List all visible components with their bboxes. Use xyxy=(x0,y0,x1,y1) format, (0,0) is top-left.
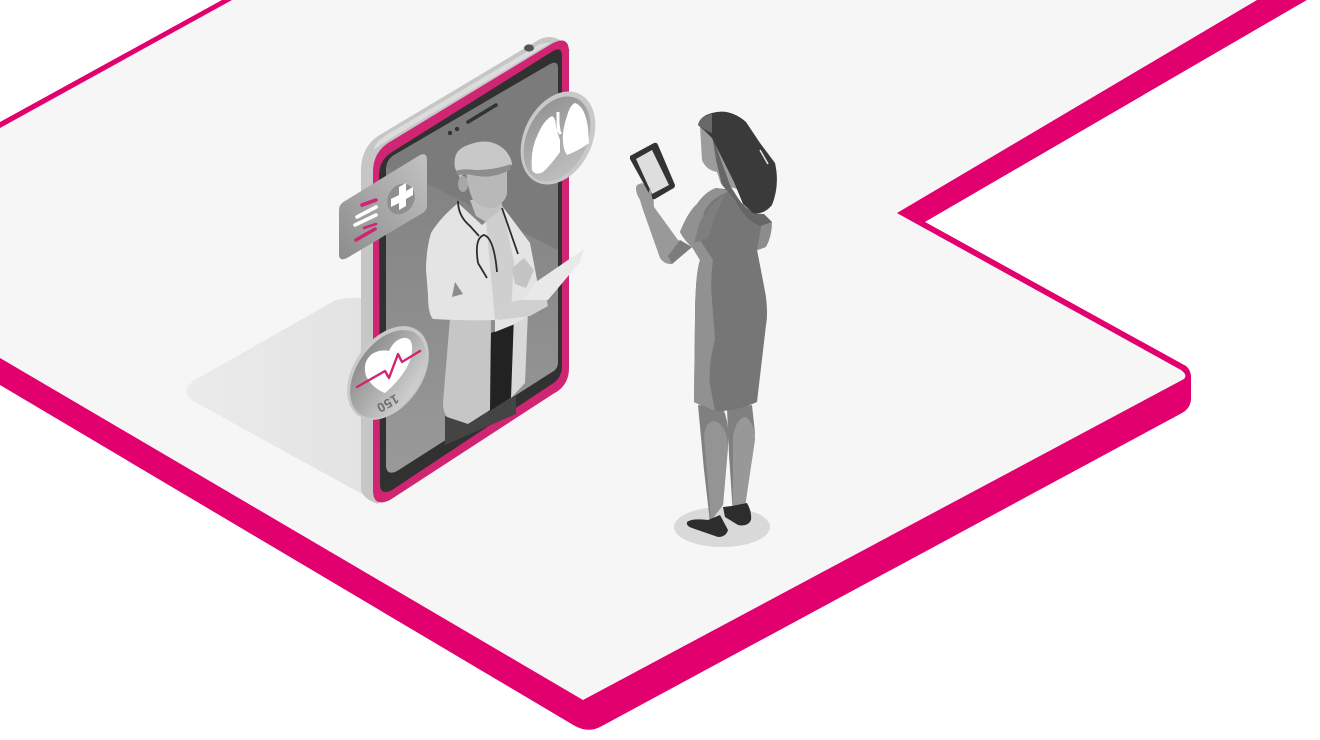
left leg xyxy=(698,405,728,522)
doctor xyxy=(426,141,584,445)
floor shadow xyxy=(674,507,770,547)
dress back xyxy=(680,188,767,411)
card: medical cross xyxy=(339,154,427,259)
card text lines xyxy=(355,200,376,240)
handheld phone body xyxy=(630,143,675,199)
doctor tablet xyxy=(523,249,584,300)
platform: notch pink edge xyxy=(897,213,1191,378)
reading value: 150 xyxy=(374,391,402,416)
speaker bar xyxy=(468,105,496,122)
screen xyxy=(386,62,558,473)
heart disc face xyxy=(335,316,441,432)
doctor coat upper xyxy=(426,203,545,332)
camera hole xyxy=(524,44,534,52)
far arm xyxy=(755,222,772,251)
handheld phone screen xyxy=(636,150,669,194)
trachea xyxy=(558,112,561,134)
lungs disc rim xyxy=(506,79,610,197)
doctor shirt and tie xyxy=(486,208,514,320)
doctor hands xyxy=(496,296,548,320)
phone side edge xyxy=(361,37,570,504)
dress light side xyxy=(680,188,730,411)
doctor coat lower right xyxy=(511,312,528,398)
phone top highlight xyxy=(373,42,552,150)
right calf highlight xyxy=(733,417,755,514)
near arm xyxy=(636,183,692,264)
doctor ear xyxy=(458,176,468,192)
stethoscope xyxy=(458,201,518,278)
disc: heart rate xyxy=(330,311,446,435)
right shoe xyxy=(723,503,751,525)
heart disc rim xyxy=(330,311,446,435)
cross disc xyxy=(382,179,420,219)
screen back wall xyxy=(386,62,558,473)
sleeve shade xyxy=(694,193,726,243)
white cross xyxy=(391,183,413,210)
doctor coat lower left xyxy=(443,318,491,424)
doctor trouser shadow xyxy=(445,395,516,445)
doctor glasses strap xyxy=(456,164,511,177)
front camera dots xyxy=(448,127,459,135)
left calf highlight xyxy=(704,421,728,520)
doctor trousers xyxy=(488,324,515,412)
pulse line xyxy=(357,351,420,387)
right lung xyxy=(563,103,589,155)
coat sleeve gap xyxy=(452,282,463,297)
doctor hair xyxy=(455,141,512,178)
lungs disc face xyxy=(510,85,604,193)
large phone with doctor xyxy=(361,37,584,504)
phone cast shadow xyxy=(186,298,362,494)
left lung xyxy=(532,116,560,174)
screen floor xyxy=(386,168,558,480)
thumb xyxy=(646,187,654,207)
hair xyxy=(698,112,777,213)
phone dark bezel xyxy=(379,49,562,492)
left shoe xyxy=(687,515,728,537)
arm shade xyxy=(668,240,692,264)
card body xyxy=(339,154,427,259)
disc: lungs xyxy=(506,79,610,197)
hair front xyxy=(698,114,712,133)
hair underside xyxy=(712,135,772,226)
neck and face xyxy=(700,125,740,190)
hair highlight xyxy=(760,150,768,164)
right leg xyxy=(727,405,755,514)
doctor neck xyxy=(470,198,503,222)
platform: notch cut-out xyxy=(925,0,1320,366)
doctor face xyxy=(466,166,507,208)
woman holding a phone xyxy=(630,112,777,547)
phone pink frame xyxy=(373,40,569,502)
heart icon xyxy=(365,338,412,393)
